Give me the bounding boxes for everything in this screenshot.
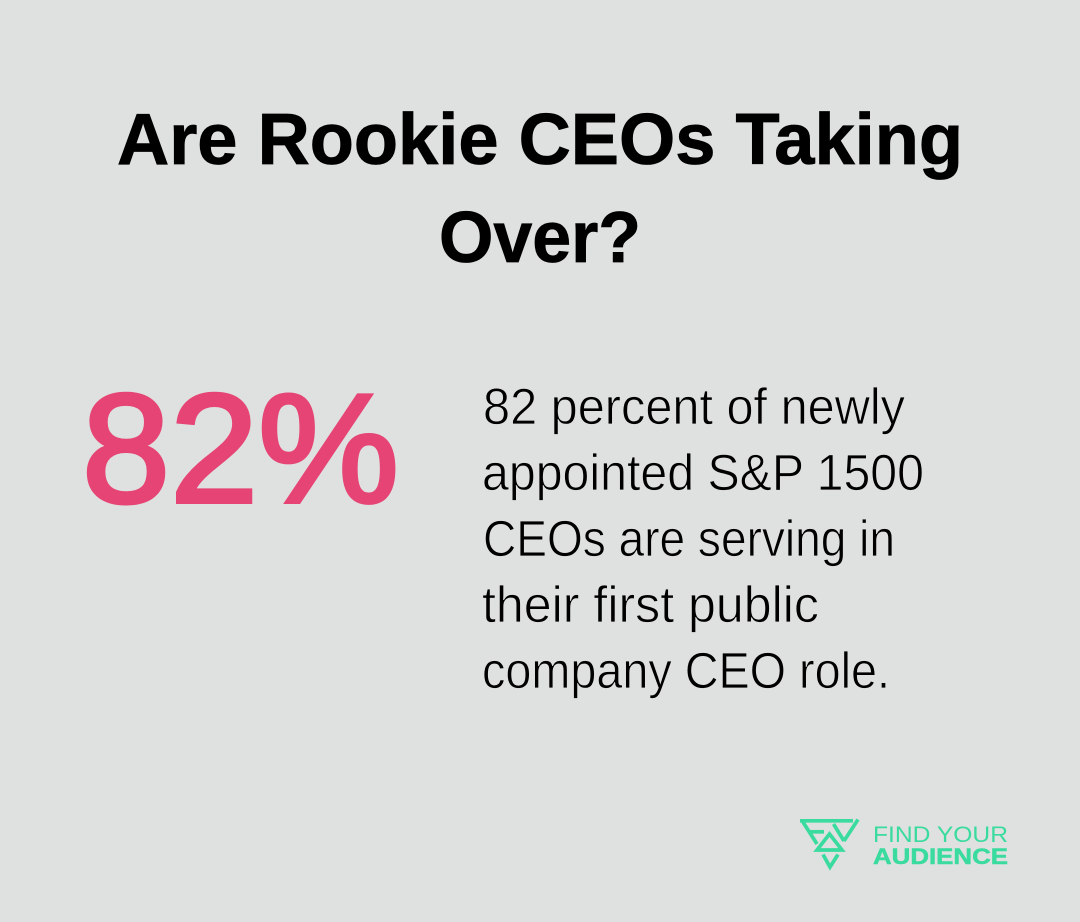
description text: appointed S&P 1500 — [482, 444, 924, 501]
description text: company CEO role. — [482, 642, 890, 699]
logo: Find Your Audience — [800, 820, 1008, 869]
description text: their first public — [482, 576, 819, 633]
title: Are Rookie CEOs Taking — [117, 100, 963, 180]
big stat: 82%: 82% — [82, 362, 399, 535]
wordmark: FIND YOUR — [873, 822, 1008, 847]
title: Over? — [439, 198, 641, 278]
description text: CEOs are serving in — [483, 510, 895, 567]
icon: triangle logo mark — [800, 820, 858, 867]
logo: Find Your Audience: AUDIENCE — [873, 844, 1008, 869]
description text: 82 percent of newly — [483, 378, 905, 435]
title — [117, 100, 963, 278]
description text — [482, 378, 924, 699]
